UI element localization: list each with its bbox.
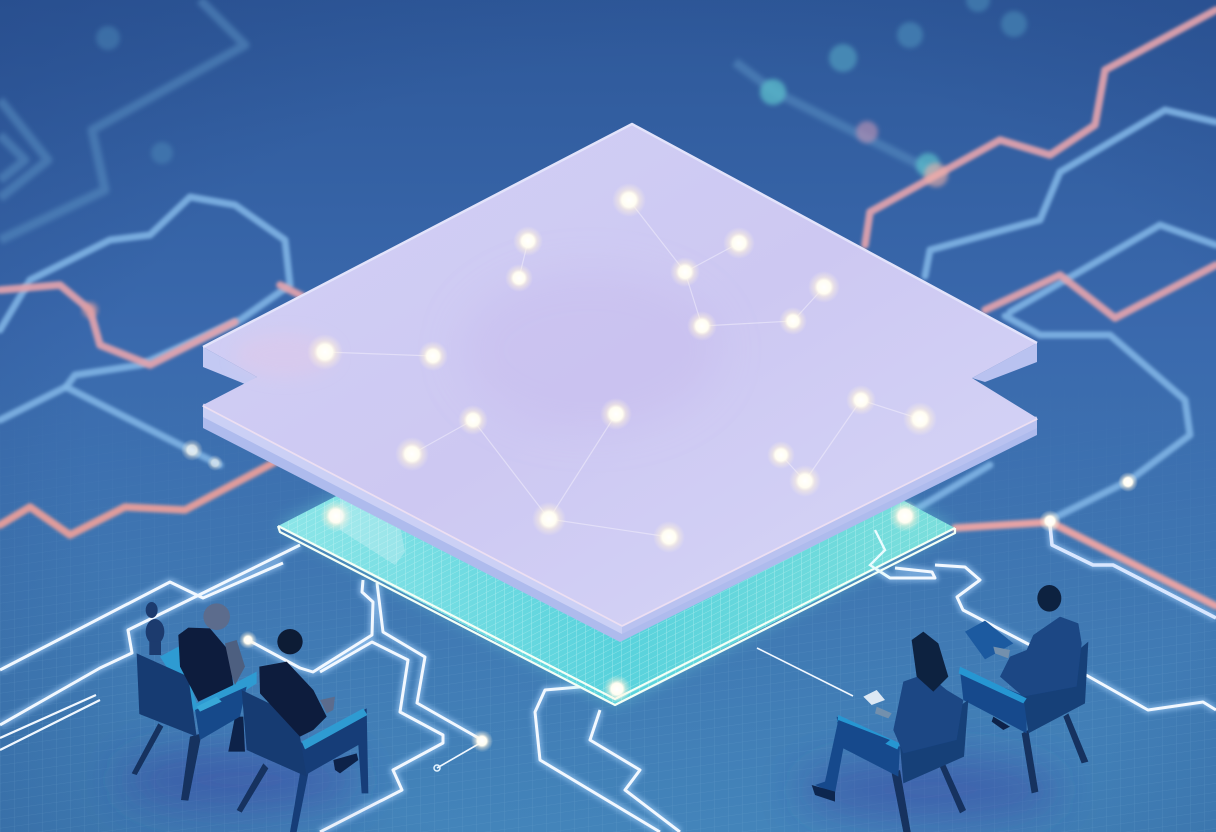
woman with papers — [812, 632, 963, 802]
seated pair, right — [812, 585, 1088, 832]
lower platform plate — [203, 360, 1037, 642]
glowing white circuit traces — [0, 525, 1216, 832]
man with grey hair — [178, 603, 245, 702]
upper platform plate — [203, 124, 1037, 625]
seated pair, left — [132, 602, 368, 832]
constellation links on plate — [325, 200, 920, 537]
man with tablet chair — [959, 642, 1088, 793]
chair shadows — [120, 746, 1060, 824]
small robot statuette — [146, 602, 164, 655]
dark suited man — [259, 629, 335, 737]
faint background traces — [0, 0, 930, 240]
chip glow points and loops — [320, 490, 921, 703]
right chair — [237, 690, 368, 832]
blue circuit traces — [0, 110, 1216, 520]
background dots — [96, 0, 1027, 177]
green glowing chip layer — [278, 350, 955, 705]
circuit end nodes — [82, 163, 1138, 771]
coral circuit traces — [0, 10, 1216, 606]
glowing nodes on plate — [307, 183, 937, 553]
man with tablet — [965, 585, 1082, 697]
woman chair — [837, 700, 968, 832]
left chair — [132, 647, 257, 801]
